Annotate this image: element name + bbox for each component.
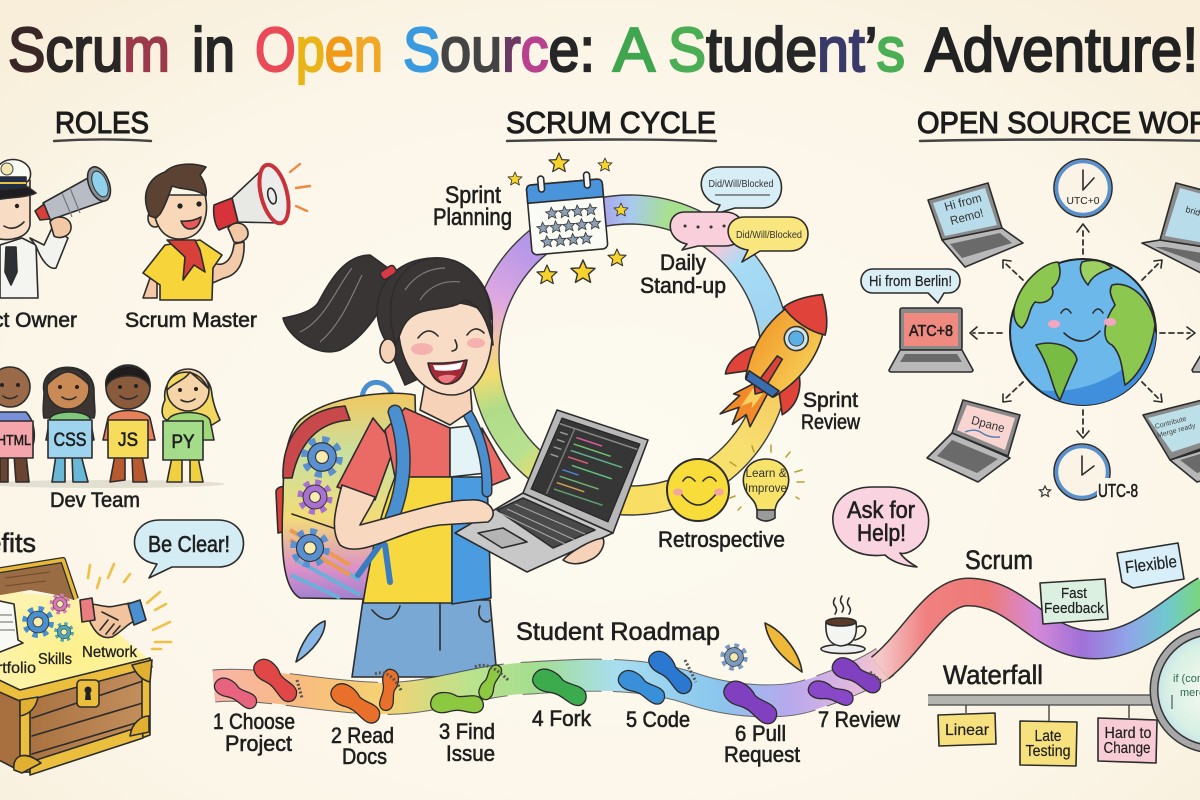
roadmap step labels: [213, 706, 900, 769]
roadmap step labels: Project: [225, 731, 292, 756]
callout: pink speech bubble: [670, 212, 744, 250]
label: retrospective: Retrospective: [658, 527, 785, 552]
note: fast feedback: Feedback: [1044, 600, 1104, 617]
note: late testing: [1020, 721, 1077, 766]
icon: laptop left: [889, 308, 973, 372]
icon: laptop bottom-left: Dpane: [970, 413, 1007, 435]
note: hard to change: Hard to: [1104, 725, 1152, 742]
icon: laptop left: ATC+8: [909, 323, 953, 340]
icon: globe: [1010, 259, 1156, 405]
product owner: [0, 160, 115, 332]
icon: light bulb: Learn &: [746, 468, 787, 480]
team member: js: [103, 365, 155, 482]
retrospective: [658, 445, 804, 552]
callout: ask for help: [833, 487, 929, 567]
chest labels: Skills: [38, 651, 72, 668]
icon: treasure chest: [0, 560, 171, 775]
heading: student roadmap: Student Roadmap: [516, 618, 720, 646]
title: in: [192, 16, 235, 85]
icon: laptop bottom-right: Merge ready: [1157, 422, 1197, 440]
panel: benefits: [0, 520, 244, 775]
dev team: [0, 365, 225, 512]
roadmap step labels: 5 Code: [626, 707, 690, 732]
icon: clock utc-8: UTC-8: [1098, 481, 1138, 501]
icon: handshake: [80, 598, 146, 638]
chest labels: [0, 644, 138, 677]
roadmap step labels: 2 Read: [331, 723, 394, 748]
callout: ask for help: Help!: [857, 520, 906, 547]
icon: laptop bottom-right: [1143, 398, 1200, 482]
title: Student’s: [668, 16, 905, 85]
title: A: [613, 16, 656, 85]
title: Scrum: [8, 16, 170, 85]
roadmap step labels: Request: [724, 742, 800, 767]
label: waterfall: Waterfall: [943, 660, 1043, 690]
icon: clock utc-8: [1039, 444, 1139, 501]
note: late testing: Late: [1034, 728, 1062, 745]
title: Open: [255, 16, 383, 85]
label: sprint planning: Planning: [433, 204, 512, 231]
roadmap step labels: 7 Review: [818, 707, 900, 732]
roadmap step labels: 6 Pull: [735, 721, 786, 746]
team member: py: [162, 369, 220, 482]
icon: megaphone: [214, 162, 294, 230]
roadmap step labels: Docs: [342, 744, 387, 769]
jeans: [352, 600, 497, 677]
label: sprint planning: [433, 182, 512, 231]
icon: skill gears: [25, 595, 72, 640]
callout: be clear: [134, 520, 244, 578]
callout: yellow speech bubble: [728, 217, 808, 262]
icon: laptop top-left: [928, 183, 1023, 267]
note: flexible: Flexible: [1124, 552, 1178, 577]
label: daily stand-up: Daily: [660, 250, 706, 275]
icon: laptop bottom-left: [927, 400, 1020, 482]
callout: blue speech bubble: Did/Will/Blocked: [708, 178, 774, 190]
sprint planning: [433, 153, 628, 284]
label: sprint planning: Sprint: [445, 182, 501, 209]
label: sprint review: Sprint: [803, 389, 858, 412]
team member: css: [43, 367, 95, 482]
roadmap step labels: 3 Find: [439, 719, 495, 744]
icon: clock utc+0: UTC+0: [1066, 195, 1100, 207]
note: hard to change: Change: [1104, 740, 1151, 757]
callout: be clear: Be Clear!: [148, 531, 230, 557]
callout: ask for help: Ask for: [847, 497, 915, 524]
note: hard to change: [1098, 718, 1157, 763]
icon: blue feather: [296, 621, 325, 662]
icon: scrum master boy: [143, 162, 310, 300]
chart: scrum cycle ring: [470, 195, 790, 515]
daily stand-up: [640, 167, 808, 298]
title: Source:: [403, 16, 595, 85]
team member: js: JS: [118, 430, 138, 451]
note: flexible: [1117, 543, 1184, 588]
icon: small gear: [723, 646, 745, 668]
note: late testing: Testing: [1026, 743, 1070, 760]
panel: roles: [0, 160, 310, 512]
team member: py: PY: [172, 432, 195, 453]
sprint review: [702, 273, 861, 447]
arm: [334, 485, 493, 549]
icon: light bulb: Improve: [745, 483, 787, 495]
label: scrum: Scrum: [965, 545, 1033, 575]
panel: scrum vs waterfall: [880, 543, 1200, 766]
chart: rainbow path: [214, 662, 885, 701]
label: daily stand-up: Stand-up: [640, 273, 726, 298]
callout: hi from berlin: [861, 269, 960, 303]
icon: captain: [0, 160, 115, 298]
note: linear: [938, 713, 996, 746]
icon: calendar: [525, 171, 608, 255]
icon: clock utc+0: [1054, 159, 1112, 217]
team member: css: CSS: [54, 430, 86, 451]
arrows from globe: [970, 224, 1195, 438]
icon: telescope: [35, 164, 115, 220]
label: scrum master: Scrum Master: [125, 309, 257, 332]
heading: scrum cycle: SCRUM CYCLE: [506, 105, 716, 140]
roadmap step labels: 1 Choose: [213, 709, 295, 734]
icon: laptop bottom-right: Contribute: [1154, 416, 1187, 431]
label: daily stand-up: [640, 250, 726, 298]
heading: roles: ROLES: [55, 105, 149, 140]
label: sprint review: [801, 389, 861, 434]
panel: scrum cycle: [433, 153, 861, 552]
icon: gold feather: [765, 623, 802, 672]
panel: open source world: [861, 159, 1200, 501]
icon: coffee cup: [821, 596, 866, 654]
panel: student character: [276, 255, 648, 677]
icon: light bulb: [730, 445, 804, 521]
team member: html: [0, 367, 34, 482]
callout: blue speech bubble: [701, 167, 782, 214]
icons: stars: [508, 153, 628, 284]
waterfall line: [928, 695, 1156, 721]
head: [283, 255, 493, 425]
icon: laptop right: [1192, 348, 1200, 372]
icon: laptop top-left: Remo!: [949, 206, 985, 228]
chest labels: Network: [82, 644, 138, 661]
icon: smiley: [667, 459, 729, 521]
panel: student roadmap: [211, 596, 900, 769]
icon: magnifying glass: [1154, 631, 1200, 749]
roadmap step labels: Issue: [446, 741, 495, 766]
callout: yellow speech bubble: Did/Will/Blocked: [736, 229, 802, 241]
label: sprint review: Review: [801, 411, 861, 434]
icon: rocket: [702, 273, 853, 447]
roadmap step labels: 4 Fork: [532, 706, 592, 731]
icon: laptop with code: [455, 410, 648, 572]
label: dev team: Dev Team: [50, 489, 140, 512]
icon: laptop top-right: [1142, 183, 1200, 275]
chart: scrum wavy band: [880, 590, 1200, 668]
note: linear: Linear: [945, 722, 990, 739]
note: fast feedback: Fast: [1061, 585, 1088, 602]
shirt: [337, 405, 510, 604]
icon: backpack: [276, 382, 420, 600]
icon: laptop top-left: Hi from: [943, 191, 983, 214]
scrum master: [125, 162, 310, 332]
title: [8, 16, 1198, 85]
footprints: [211, 647, 885, 727]
note: fast feedback: [1040, 579, 1108, 624]
callout: hi from berlin: Hi from Berlin!: [869, 274, 952, 290]
